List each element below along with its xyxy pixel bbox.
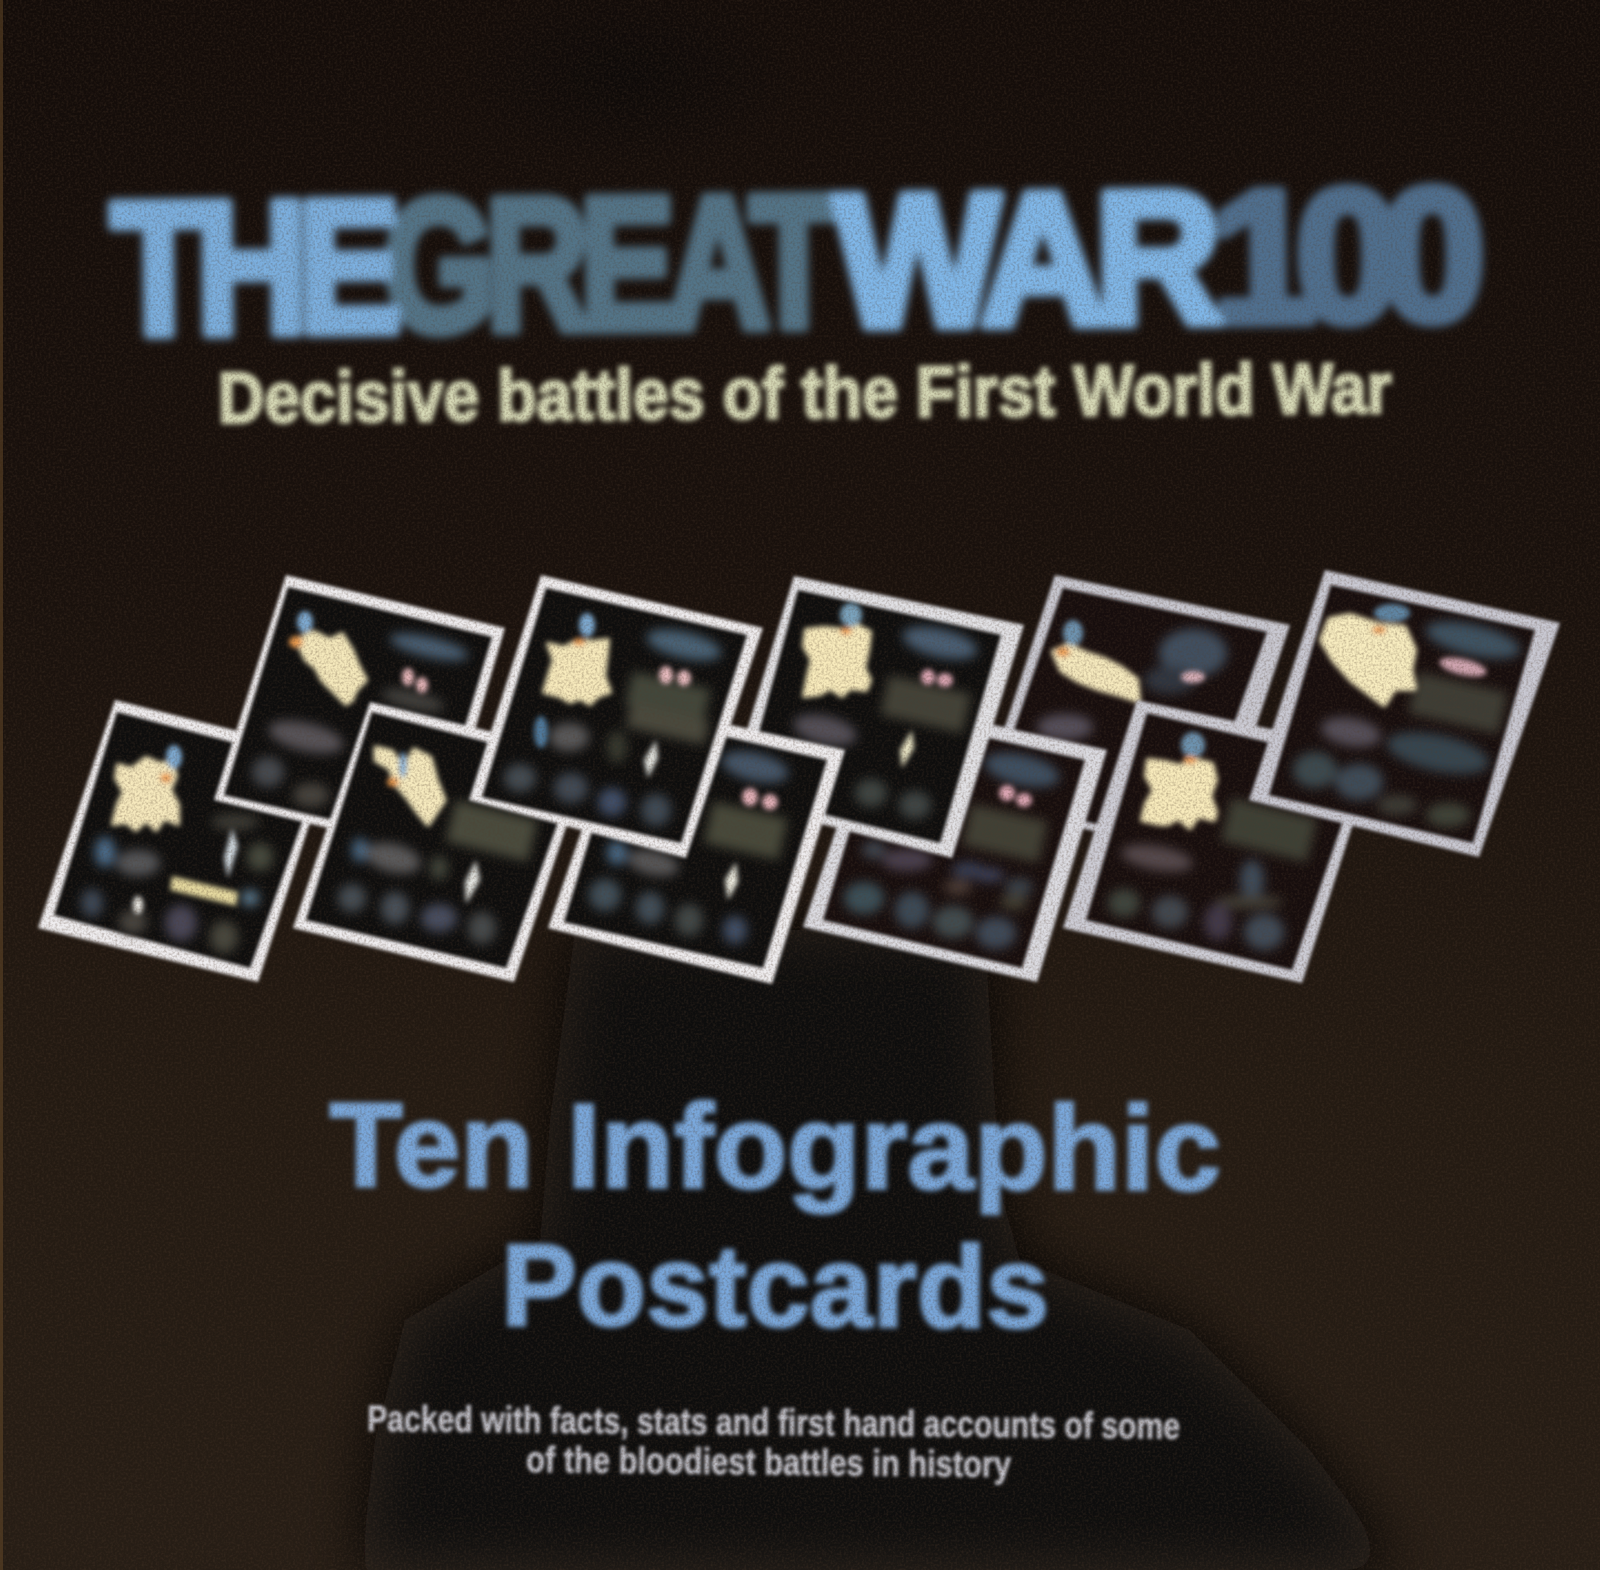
title word: THE: THE (110, 161, 397, 374)
postcard 10: large country back right (1249, 570, 1560, 857)
title: THE GREAT WAR 100 (110, 149, 1478, 374)
tagline line 1: Packed with facts, stats and first hand accounts of some (367, 1398, 1180, 1447)
postcard 5: front third (548, 702, 845, 984)
tagline line 2: of the bloodiest battles in history (526, 1439, 1012, 1485)
postcard 4: back second (469, 575, 763, 858)
heading line 1: Ten Infographic (329, 1078, 1221, 1216)
postcard 6: back third (726, 576, 1024, 858)
title word: WAR: WAR (834, 152, 1219, 366)
postcard 2: Belgium back left (214, 575, 505, 855)
postcard 1: France front left (38, 700, 332, 982)
tagline (367, 1398, 1180, 1485)
edge highlight of the board (0, 0, 3, 1570)
postcard 7: front fourth (803, 700, 1107, 982)
reflected silhouette of photographer (360, 930, 1400, 1570)
title word: GREAT: GREAT (382, 156, 837, 371)
reflected shadow at top of board (460, 0, 800, 165)
postcards group (38, 570, 1560, 984)
title word: 100: 100 (1210, 149, 1478, 362)
subtitle: Decisive battles of the First World War (217, 349, 1392, 439)
heading: Ten Infographic Postcards (329, 1078, 1221, 1352)
heading line 2: Postcards (501, 1220, 1049, 1352)
postcard 8: back fourth (979, 575, 1290, 858)
postcard 9: front fifth (1063, 700, 1376, 983)
postcard 3: Belgium front second (293, 702, 590, 982)
